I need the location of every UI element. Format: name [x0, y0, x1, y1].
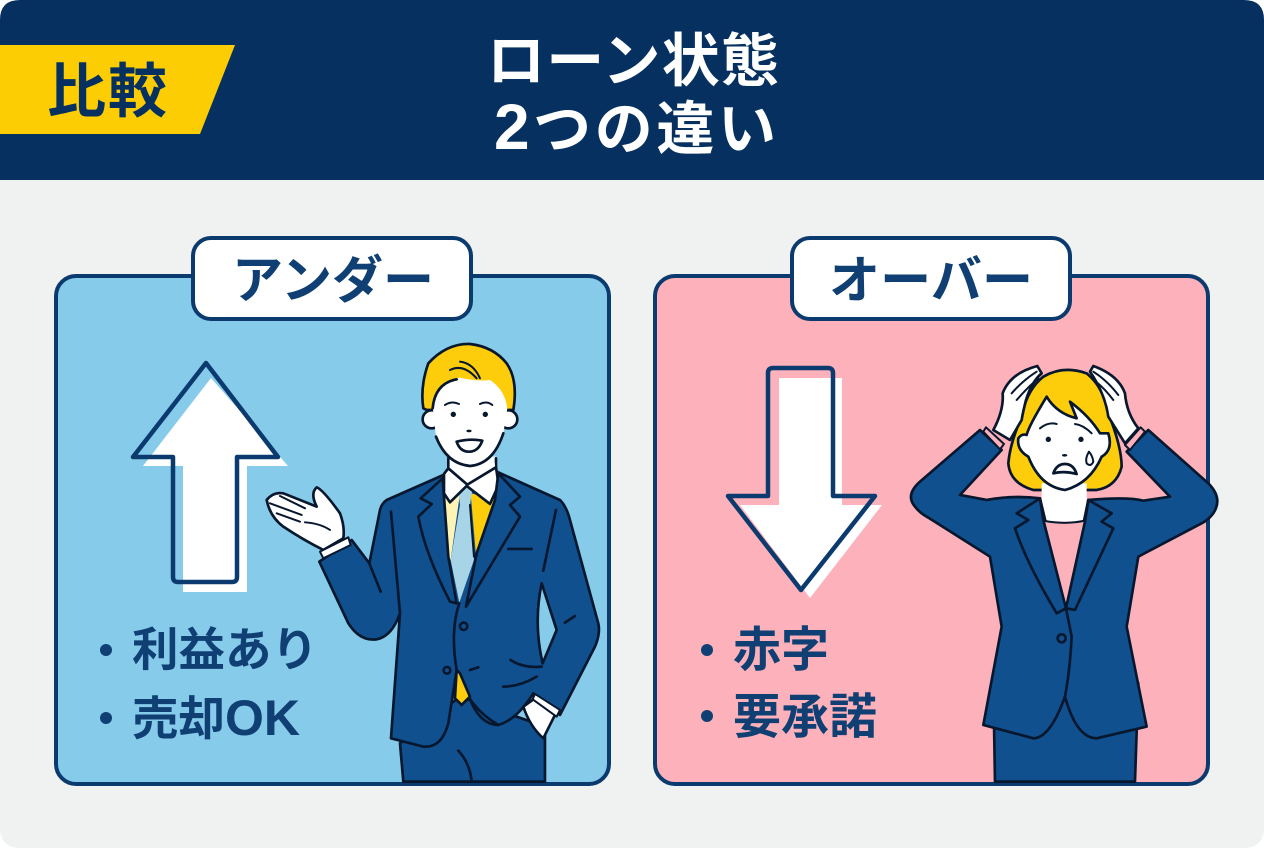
title: 2つの違い: [494, 91, 776, 163]
panel: over: [655, 238, 1208, 784]
category tag: 比較: [47, 59, 167, 125]
title: ローン状態: [487, 29, 779, 94]
icon: down arrow: [728, 368, 882, 598]
list: under points: 利益あり: [132, 624, 318, 676]
list: under points: [100, 624, 318, 746]
illustration: businessman: [267, 344, 599, 782]
list: over points: 赤字: [733, 624, 829, 677]
list: over points: [701, 624, 877, 744]
label: over: オーバー: [829, 252, 1033, 309]
icon: up arrow: [133, 363, 288, 592]
panel: under: [56, 238, 609, 784]
label: over: [792, 238, 1070, 319]
illustration: worried businesswoman: [911, 366, 1217, 782]
list: under points: 売却OK: [132, 690, 300, 746]
header band: [0, 0, 1264, 180]
label: under: アンダー: [232, 252, 434, 309]
category tag: [0, 45, 235, 134]
list: over points: 要承諾: [733, 691, 877, 744]
title: [487, 29, 779, 163]
label: under: [193, 238, 471, 319]
